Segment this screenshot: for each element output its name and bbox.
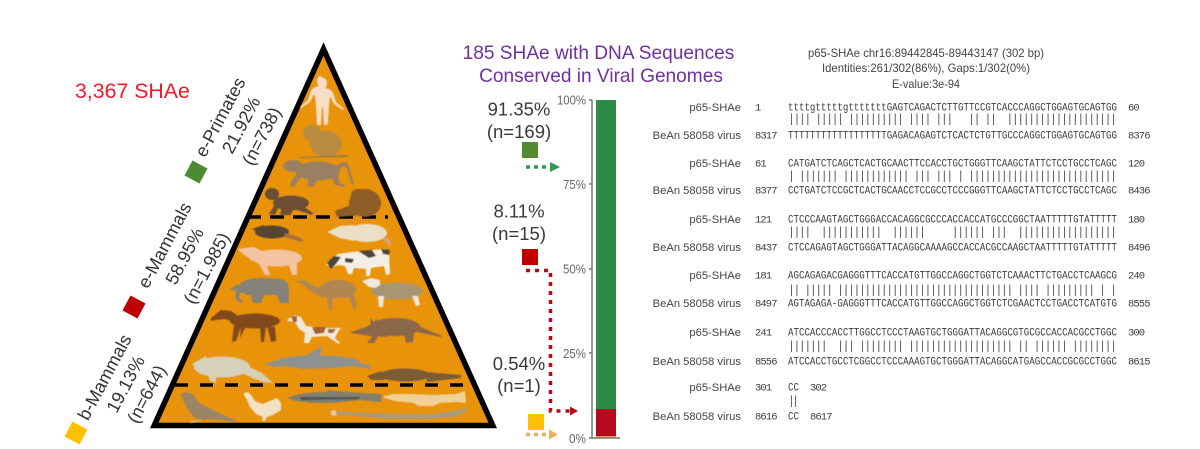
group label: e-Primates: e-Primates (191, 74, 249, 160)
alignment block 6 (653, 382, 832, 424)
alignment block 3 (653, 214, 1150, 254)
marker: yellow (528, 414, 544, 430)
icon: chimpanzee (265, 188, 313, 215)
axis labels (557, 94, 586, 446)
group label: e-Primates: 21.92% (218, 94, 264, 157)
alignment block 3: 180 (1128, 214, 1145, 226)
alignment block 5 (653, 327, 1150, 368)
bar segment: yellow (596, 436, 616, 438)
icon: orangutan (335, 189, 381, 217)
icon: camel (296, 280, 357, 310)
group label: b-Mammals (65, 331, 170, 444)
alignment block 5: ATCCACCTGCCTCGGCCTCCCAAAGTGCTGGGATTACAGGCATGAGCCACCGCGCCTGGC (788, 356, 1117, 368)
alignment block 1: |||| ||||| |||||||||| |||| ||| || || |||||||||||||||||||| (788, 114, 1117, 126)
alignment block 5: BeAn 58058 virus (653, 356, 741, 368)
axis labels: 0% (569, 432, 586, 446)
icon: cow (326, 249, 390, 276)
alignment block 2: 8436 (1128, 186, 1150, 198)
icon: macaque (298, 125, 348, 158)
alignment block 3: 121 (755, 214, 772, 226)
alignment header: E-value:3e-94 (892, 77, 960, 91)
alignment block 5: p65-SHAe (689, 327, 741, 339)
icon: aardvark (351, 318, 442, 343)
alignment block 6: || (788, 396, 799, 408)
arrow: yellow (526, 430, 558, 440)
chart title (463, 43, 734, 87)
alignment block 1: 8376 (1128, 130, 1150, 142)
alignment block 1: 60 (1128, 102, 1139, 114)
group label: b-Mammals: (n=644) (123, 362, 170, 426)
group label: e-Primates (185, 74, 285, 183)
icon: sheep (362, 278, 423, 307)
pyramid (154, 49, 493, 426)
alignment block 4: 181 (755, 270, 772, 282)
chart title: Conserved in Viral Genomes (479, 66, 723, 87)
callout: primates share (487, 98, 560, 172)
alignment block 3: CTCCCAAGTAGCTGGGACCACAGGCGCCCACCACCATGCCCGGCTAATTTTTGTATTTTT (788, 214, 1117, 226)
alignment block 4 (653, 270, 1150, 310)
alignment block 4: AGTAGAGA-GAGGGTTTCACCATGTTGGCCAGGCTGGTCTCGAACTCCTGACCTCATGTG (788, 298, 1117, 310)
alignment block 2: 61 (755, 158, 766, 170)
icon: platypus (367, 368, 461, 382)
alignment block 1: p65-SHAe (689, 102, 741, 114)
callout: mammals share (492, 200, 578, 416)
alignment block 6: p65-SHAe (689, 382, 741, 394)
alignment block 2: 120 (1128, 158, 1145, 170)
icon: elephant (229, 278, 289, 303)
alignment block 4: 8555 (1128, 298, 1150, 310)
icon: chicken (244, 392, 281, 421)
group label: e-Mammals: e-Mammals (134, 199, 196, 291)
alignment block 6: 301 (755, 382, 772, 394)
alignment block 2: CATGATCTCAGCTCACTGCAACTTCCACCTGCTGGGTTCAAGCTATTCTCCTGCCTCAGC (788, 158, 1117, 170)
divider: mammals and basal vertebrates (175, 383, 463, 387)
alignment block 4: p65-SHAe (689, 270, 741, 282)
callout: primates share: 91.35% (488, 98, 550, 120)
alignment block 5: 8556 (755, 356, 777, 368)
alignment block 1 (653, 102, 1150, 142)
alignment block 6: 8616 (755, 412, 777, 424)
alignment header: Identities:261/302(86%), Gaps:1/302(0%) (822, 61, 1030, 75)
axis (589, 100, 620, 438)
animal illustrations (180, 76, 468, 423)
alignment block 3: BeAn 58058 virus (653, 242, 741, 254)
alignment block 5: 300 (1128, 328, 1145, 340)
icon: pig (237, 247, 302, 275)
alignment block 5: 241 (755, 328, 772, 340)
group label: b-Mammals: 19.13% (103, 353, 149, 416)
alignment block 6: BeAn 58058 virus (653, 411, 741, 423)
alignment block 2 (653, 158, 1150, 198)
alignment block 1: BeAn 58058 virus (653, 130, 741, 142)
alignment block 5: 8615 (1128, 356, 1150, 368)
legend marker: e-Mammals (123, 296, 145, 318)
icon: zebrafish (287, 390, 382, 403)
marker: red (522, 249, 538, 265)
alignment block 4: 8497 (755, 298, 777, 310)
alignment block 6: CC (788, 382, 799, 394)
alignment block 6: 302 (810, 382, 827, 394)
axis labels: 25% (563, 347, 586, 361)
alignment header (808, 46, 1044, 91)
alignment block 6: 8617 (810, 412, 832, 424)
marker: green (522, 142, 538, 158)
alignment block 2: 8377 (755, 186, 777, 198)
icon: dark rat (252, 225, 303, 242)
legend marker: b-Mammals (65, 422, 87, 444)
axis labels: 50% (563, 262, 586, 276)
callout: basal mammals share: 0.54% (493, 353, 545, 374)
callout: basal mammals share (493, 353, 558, 440)
axis labels: 100% (557, 94, 586, 108)
alignment block 4: AGCAGAGACGAGGGTTTCACCATGTTGGCCAGGCTGGTCTCAAACTTCTGACCTCAAGCG (788, 270, 1117, 282)
callout: mammals share: (n=15) (492, 223, 546, 244)
icon: white rat (327, 224, 391, 246)
group label: b-Mammals: b-Mammals (74, 331, 136, 423)
alignment block 4: || ||||| |||||||||||||||||||||||||||||||| |||| ||||||||| | | (788, 284, 1117, 298)
divider: primates and mammals (247, 215, 388, 219)
icon: falcon (180, 392, 237, 423)
group label: e-Primates: (n=738) (238, 104, 285, 168)
arrow: red (526, 270, 578, 416)
alignment header: p65-SHAe chr16:89442845-89443147 (302 bp) (808, 46, 1044, 60)
alignment block 6: CC (788, 412, 799, 424)
alignment block 5: ||||||| ||| |||||||| ||||||||||||||||||| || |||||| |||||||| (788, 340, 1117, 354)
callout: mammals share: 8.11% (493, 200, 545, 222)
icon: lamprey (330, 408, 468, 419)
alignment block 2: p65-SHAe (689, 158, 741, 170)
icon: dog (287, 315, 342, 344)
alignment block 2: CCTGATCTCCGCTCACTGCAACCTCCGCCTCCCGGGTTCAAGCTATTCTCCTGCCTCAGC (788, 186, 1117, 198)
alignment block 3: |||| ||||||||||| |||||| |||||| ||| |||||||||||||||||| (788, 226, 1117, 240)
alignment block 5: ATCCACCCACCTTGGCCTCCCTAAGTGCTGGGATTACAGGCGTGCGCCACCACGCCTGGC (788, 328, 1117, 340)
callout: basal mammals share: (n=1) (497, 375, 541, 396)
stacked bar chart (557, 94, 620, 446)
sequence alignment (653, 102, 1150, 424)
alignment block 1: TTTTTTTTTTTTTTTTTTGAGACAGAGTCTCACTCTGTTGCCCAGGCTGGAGTGCAGTGG (788, 130, 1117, 142)
alignment block 1: ttttgtttttgtttttttGAGTCAGACTCTTGTTCCGTCACCCAGGCTGGAGTGCAGTGG (788, 102, 1117, 114)
icon: manatee (192, 356, 273, 383)
group label: e-Mammals: (n=1.985) (180, 229, 234, 307)
alignment block 4: BeAn 58058 virus (653, 298, 741, 310)
icon: human (300, 76, 344, 125)
group label: e-Mammals: 58.95% (162, 225, 208, 288)
arrow: green (526, 162, 560, 172)
alignment block 4: 240 (1128, 270, 1145, 282)
chart title: 185 SHAe with DNA Sequences (463, 43, 734, 64)
icon: horse (211, 310, 280, 342)
alignment block 3: p65-SHAe (689, 214, 741, 226)
legend marker: e-Primates (185, 161, 207, 183)
alignment block 3: 8437 (755, 242, 777, 254)
icon: dolphin (264, 346, 371, 369)
alignment block 3: 8496 (1128, 242, 1150, 254)
callout: primates share: (n=169) (487, 121, 551, 142)
alignment block 1: 8317 (755, 130, 777, 142)
alignment block 2: BeAn 58058 virus (653, 185, 741, 197)
icon: baboon (283, 160, 354, 187)
pyramid body (154, 49, 493, 426)
alignment block 2: | ||||||| |||||||||||| ||| ||| | ||||||||||||||||||||||||||| (788, 170, 1117, 184)
alignment block 3: CTCCAGAGTAGCTGGGATTACAGGCAAAAGCCACCACGCCAAGCTAATTTTTGTATTTTT (788, 242, 1117, 254)
alignment block 1: 1 (755, 102, 761, 114)
group label: e-Mammals (123, 199, 234, 318)
bar segment: green (596, 100, 616, 409)
icon: medaka (384, 391, 466, 406)
total count heading: 3,367 SHAe (75, 79, 190, 103)
axis labels: 75% (563, 178, 586, 192)
bar segment: red (596, 409, 616, 436)
